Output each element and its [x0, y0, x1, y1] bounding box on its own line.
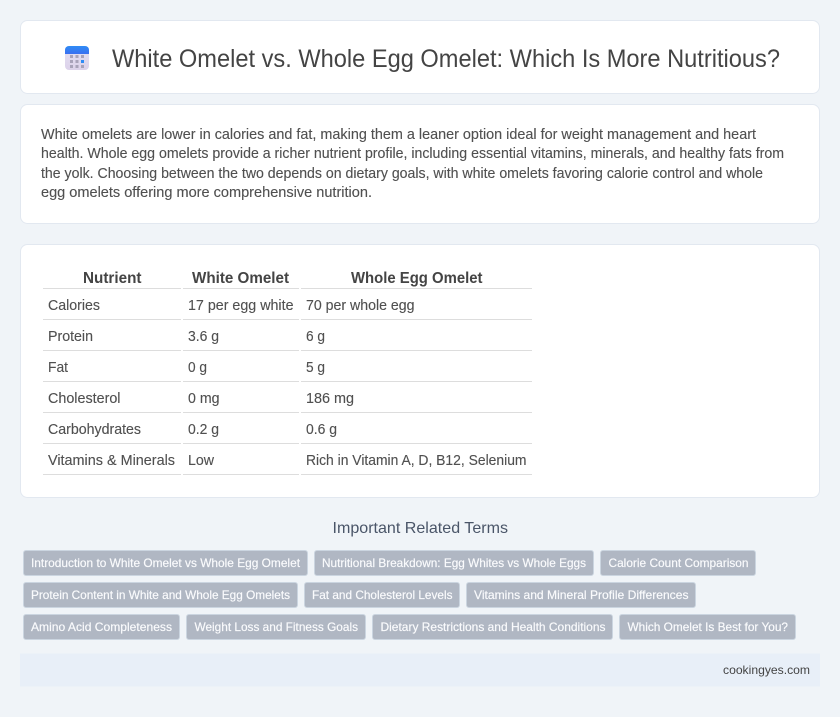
row: vitamins and minerals: Vitamins & Minerals: [48, 453, 175, 469]
title: White Omelet vs. Whole Egg Omelet: Which Is More Nutritious?: [112, 45, 780, 73]
row: protein: 6 g: [306, 329, 325, 345]
tag: Amino Acid Completeness: [31, 620, 172, 634]
row: carbohydrates: 0.2 g: [188, 422, 219, 438]
row: protein: 3.6 g: [188, 329, 219, 345]
row: fat: [48, 360, 325, 376]
tag: [372, 614, 612, 640]
row: calories: [48, 298, 414, 314]
row: calories: 70 per whole egg: [306, 298, 414, 314]
related term tags: [24, 550, 796, 640]
tag: Which Omelet Is Best for You?: [628, 620, 788, 634]
row: protein: Protein: [48, 329, 93, 345]
tag: Introduction to White Omelet vs Whole Egg Omelet: [31, 556, 301, 570]
tag: [620, 614, 796, 640]
tag: Calorie Count Comparison: [608, 556, 748, 570]
table header: Whole Egg Omelet: [351, 270, 483, 287]
row: carbohydrates: Carbohydrates: [48, 422, 141, 438]
summary text: White omelets are lower in calories and fat, making them a leaner option ideal for weight management and heart: [41, 127, 756, 143]
panel: nutrient table: [20, 244, 820, 498]
panel: summary: [20, 104, 820, 224]
row: cholesterol: 186 mg: [306, 391, 354, 407]
row: carbohydrates: [48, 422, 337, 438]
row: protein: [48, 329, 325, 345]
table header: White Omelet: [192, 270, 290, 287]
tag: Weight Loss and Fitness Goals: [194, 620, 358, 634]
summary text: health. Whole egg omelets provide a richer nutrient profile, including essential vitamins, minerals, and healthy fats from: [41, 146, 784, 162]
source credit: cookingyes.com: [723, 663, 810, 677]
row: fat: 0 g: [188, 360, 207, 376]
summary text: the yolk. Choosing between the two depends on dietary goals, with white omelets favoring calorie control and whole: [41, 166, 763, 182]
row: fat: Fat: [48, 360, 68, 376]
row: cholesterol: 0 mg: [188, 391, 220, 407]
row: carbohydrates: 0.6 g: [306, 422, 337, 438]
table header: Nutrient: [83, 270, 142, 287]
row: vitamins and minerals: Rich in Vitamin A, D, B12, Selenium: [306, 453, 527, 469]
icon: calendar: [65, 46, 89, 70]
tag: [304, 582, 460, 608]
tag: [24, 582, 298, 608]
tag: [600, 550, 756, 576]
tag: Dietary Restrictions and Health Conditions: [380, 620, 606, 634]
tag: Fat and Cholesterol Levels: [312, 588, 452, 602]
row: calories: Calories: [48, 298, 100, 314]
tag: [314, 550, 594, 576]
row: vitamins and minerals: [48, 453, 527, 469]
tag: [466, 582, 696, 608]
summary text: egg omelets offering more comprehensive nutrition.: [41, 185, 372, 201]
heading: related terms: Important Related Terms: [332, 520, 508, 537]
tag: [186, 614, 366, 640]
tag: Vitamins and Mineral Profile Differences: [474, 588, 688, 602]
tag: [24, 614, 180, 640]
panel: title: [20, 20, 820, 94]
row: calories: 17 per egg white: [188, 298, 294, 314]
row: fat: 5 g: [306, 360, 325, 376]
footer: [20, 654, 820, 686]
tag: Nutritional Breakdown: Egg Whites vs Whole Eggs: [322, 556, 586, 570]
summary text: [41, 127, 784, 201]
row: cholesterol: [48, 391, 354, 407]
tag: Protein Content in White and Whole Egg Omelets: [31, 588, 290, 602]
tag: [24, 550, 308, 576]
row: vitamins and minerals: Low: [188, 453, 215, 469]
row: cholesterol: Cholesterol: [48, 391, 120, 407]
table header: [83, 270, 483, 287]
